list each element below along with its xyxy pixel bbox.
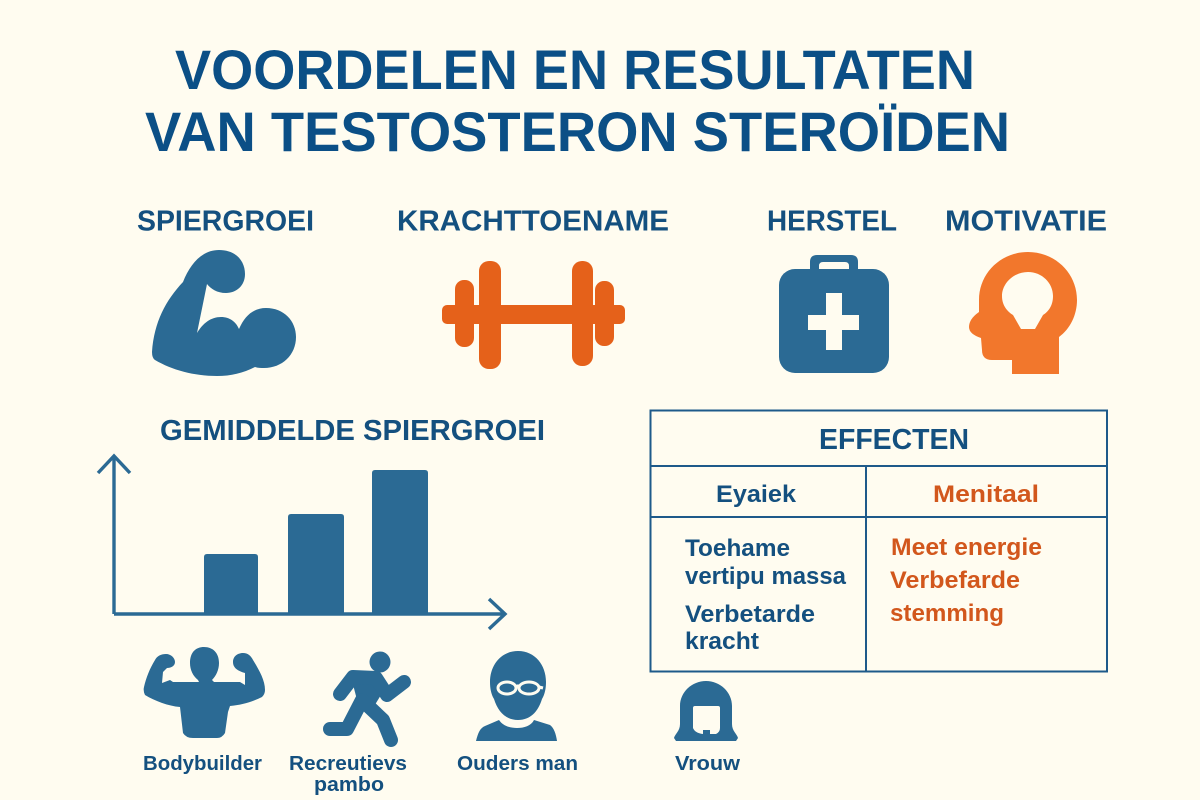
icon: flexed arm — [152, 250, 296, 376]
icon: bodybuilder — [144, 647, 265, 738]
icon: first aid kit — [779, 255, 889, 373]
bar chart — [98, 456, 505, 629]
bar: bodybuilder — [204, 554, 258, 614]
heading: motivatie: MOTIVATIE — [945, 206, 1107, 238]
heading: krachttoename: KRACHTTOENAME — [397, 206, 669, 238]
label: recreutievs pambo — [289, 753, 407, 796]
column heading: menitaal: Menitaal — [933, 481, 1039, 508]
physical effects list — [685, 535, 847, 655]
mental effects list: Meet energie — [891, 534, 1042, 561]
icon: dumbbell — [442, 261, 625, 369]
title — [145, 38, 1010, 163]
table: effecten — [650, 410, 1107, 672]
bar: oudere man — [372, 470, 428, 614]
bar: recreatief — [288, 514, 344, 614]
icon: runner — [330, 652, 404, 740]
icon: older man with glasses — [476, 651, 557, 741]
mental effects list — [890, 534, 1042, 627]
heading: spiergroei: SPIERGROEI — [137, 206, 314, 238]
icon: head with light bulb — [969, 252, 1077, 374]
physical effects list: Verbetarde — [685, 601, 815, 628]
physical effects list: Toehame — [685, 535, 790, 562]
title: VAN TESTOSTERON STEROÏDEN — [145, 100, 1010, 163]
heading: herstel: HERSTEL — [767, 206, 897, 238]
heading: gemiddelde spiergroei: GEMIDDELDE SPIERGROEI — [160, 415, 545, 447]
label: recreutievs pambo: Recreutievs — [289, 753, 407, 775]
mental effects list: stemming — [890, 600, 1004, 627]
label: ouders man: Ouders man — [457, 753, 578, 775]
physical effects list: kracht — [685, 628, 759, 655]
icon: woman — [674, 681, 738, 741]
title: VOORDELEN EN RESULTATEN — [175, 38, 975, 101]
label: vrouw: Vrouw — [675, 753, 740, 775]
physical effects list: vertipu massa — [685, 563, 847, 590]
label: recreutievs pambo: pambo — [314, 774, 384, 796]
table heading: EFFECTEN — [819, 424, 969, 456]
label: bodybuilder: Bodybuilder — [143, 753, 262, 775]
column heading: eyaiek: Eyaiek — [716, 481, 797, 508]
table grid — [650, 410, 1107, 672]
mental effects list: Verbefarde — [890, 567, 1020, 594]
chart axes — [98, 456, 505, 629]
